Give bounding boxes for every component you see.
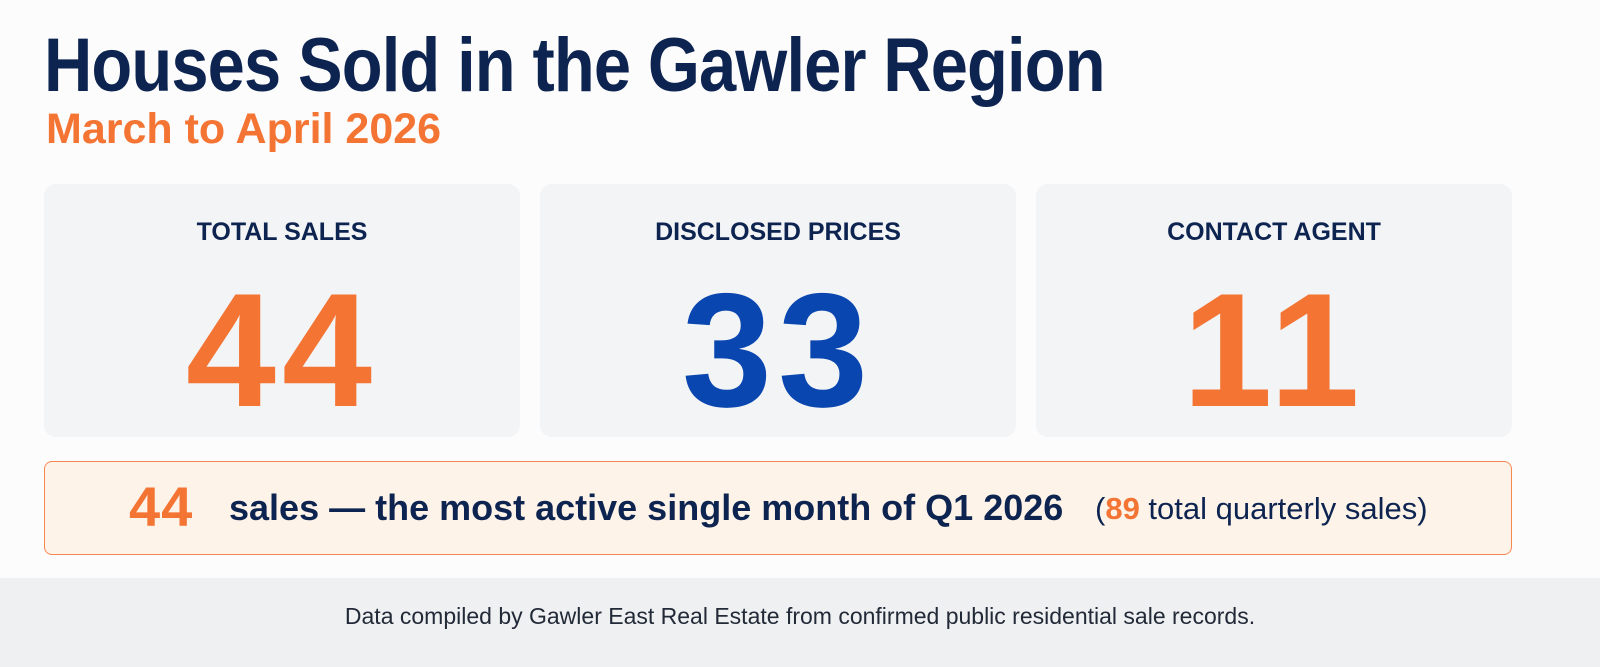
title: Houses Sold in the Gawler Region: [44, 23, 1105, 108]
label: TOTAL SALES: [197, 218, 367, 246]
footer: [0, 578, 1600, 667]
subtitle: March to April 2026: [46, 105, 441, 153]
callout: [44, 461, 1512, 555]
label: CONTACT AGENT: [1167, 218, 1381, 246]
callout text: sales — the most active single month of Q1 2026: [229, 487, 1063, 528]
footer: Data compiled by Gawler East Real Estate from confirmed public residential sale records.: [345, 603, 1255, 629]
callout number: 44: [129, 475, 193, 538]
number: 44: [186, 260, 378, 441]
panel: disclosed prices: [540, 184, 1016, 437]
label: DISCLOSED PRICES: [655, 218, 901, 246]
panel: contact agent: [1036, 184, 1512, 437]
panel: total sales: [44, 184, 520, 437]
callout note: (89 total quarterly sales): [1095, 491, 1428, 526]
number: 11: [1182, 260, 1366, 441]
number: 33: [682, 260, 874, 441]
